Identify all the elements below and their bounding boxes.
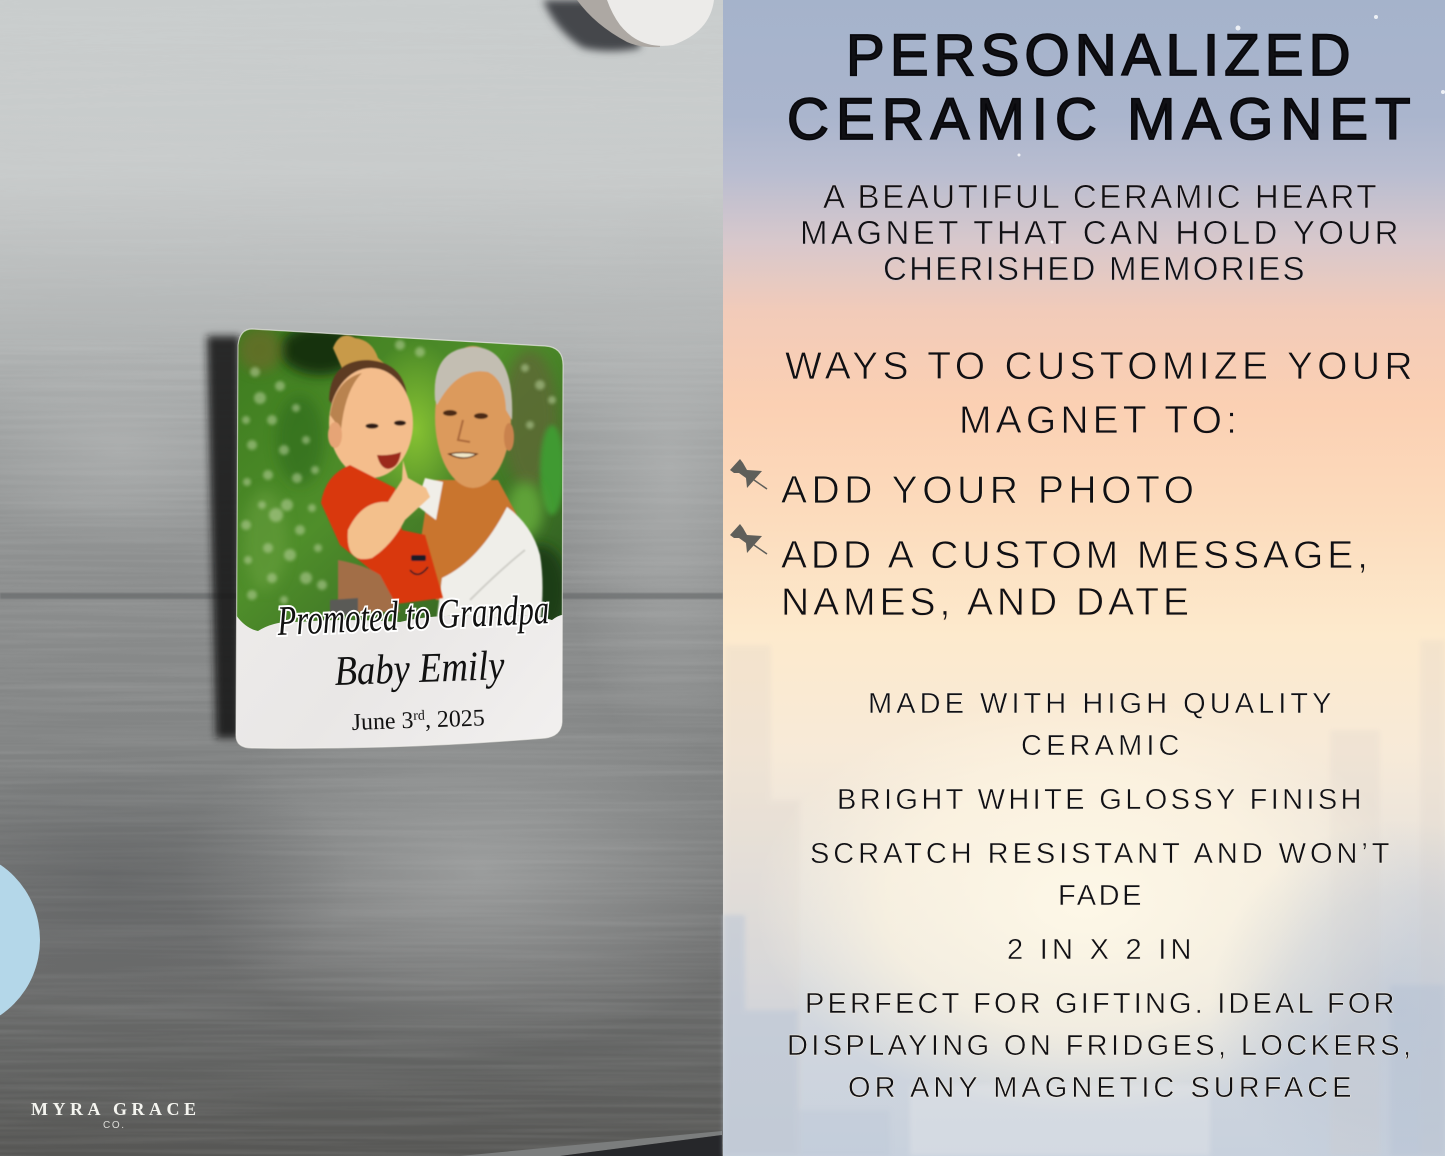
subtitle bbox=[800, 178, 1398, 287]
list: product features: BRIGHT WHITE GLOSSY FINISH bbox=[837, 784, 1362, 816]
magnet body bbox=[236, 329, 563, 748]
baby bbox=[321, 336, 443, 615]
list: product features: DISPLAYING ON FRIDGES, LOCKERS, bbox=[787, 1030, 1411, 1062]
list: product features: CERAMIC bbox=[1021, 730, 1180, 762]
magnet message: rd bbox=[413, 708, 425, 724]
icon: blue round magnet at lower left bbox=[0, 850, 40, 1030]
title bbox=[787, 23, 1410, 152]
logo: Myra Grace Co.: MYRA GRACE bbox=[31, 1099, 196, 1119]
icon: push pin 2 bbox=[730, 524, 767, 554]
list: customization options: ADD A CUSTOM MESSAGE, bbox=[781, 534, 1368, 577]
magnet photo bbox=[230, 320, 570, 736]
magnet message: June 3 bbox=[351, 708, 414, 736]
list: product features: OR ANY MAGNETIC SURFACE bbox=[848, 1072, 1352, 1104]
heading: ways to customize: MAGNET TO: bbox=[959, 399, 1237, 442]
magnet message: Promoted to Grandpa bbox=[276, 587, 550, 645]
magnet message bbox=[276, 587, 550, 736]
list: customization options: ADD YOUR PHOTO bbox=[781, 469, 1194, 512]
heading: ways to customize: WAYS TO CUSTOMIZE YOUR bbox=[785, 345, 1412, 388]
magnet edge highlight bbox=[236, 329, 563, 748]
magnet message: Baby Emily bbox=[334, 643, 506, 695]
heading: ways to customize bbox=[785, 345, 1412, 442]
list: customization options: NAMES, AND DATE bbox=[781, 581, 1189, 624]
magnet message: , 2025 bbox=[425, 705, 485, 733]
list: product features: SCRATCH RESISTANT AND WON’T bbox=[810, 838, 1390, 870]
title: PERSONALIZED bbox=[846, 23, 1350, 88]
subtitle: A BEAUTIFUL CERAMIC HEART bbox=[823, 178, 1376, 215]
panel: sunset skyline background bbox=[723, 0, 1445, 1156]
foliage blossoms bbox=[241, 340, 556, 604]
list: product features: FADE bbox=[1058, 880, 1142, 912]
logo: Myra Grace Co.: CO. bbox=[103, 1120, 124, 1131]
list: customization options bbox=[781, 469, 1368, 624]
list: product features: 2 IN X 2 IN bbox=[1007, 934, 1192, 966]
subtitle: CHERISHED MEMORIES bbox=[883, 250, 1304, 287]
logo: Myra Grace Co. bbox=[31, 1099, 196, 1131]
list: product features: PERFECT FOR GIFTING. IDEAL FOR bbox=[805, 988, 1394, 1020]
product: ceramic photo magnet bbox=[207, 320, 570, 748]
magnet shadow bbox=[207, 336, 240, 738]
list: product features bbox=[787, 688, 1411, 1104]
panel: brushed metal fridge door bbox=[0, 0, 780, 1156]
title: CERAMIC MAGNET bbox=[787, 87, 1410, 152]
icon: push pin 1 bbox=[730, 459, 767, 489]
icon: white round magnet at top bbox=[543, 0, 714, 51]
grandpa bbox=[416, 346, 542, 625]
subtitle: MAGNET THAT CAN HOLD YOUR bbox=[800, 214, 1398, 251]
list: product features: MADE WITH HIGH QUALITY bbox=[868, 688, 1332, 720]
